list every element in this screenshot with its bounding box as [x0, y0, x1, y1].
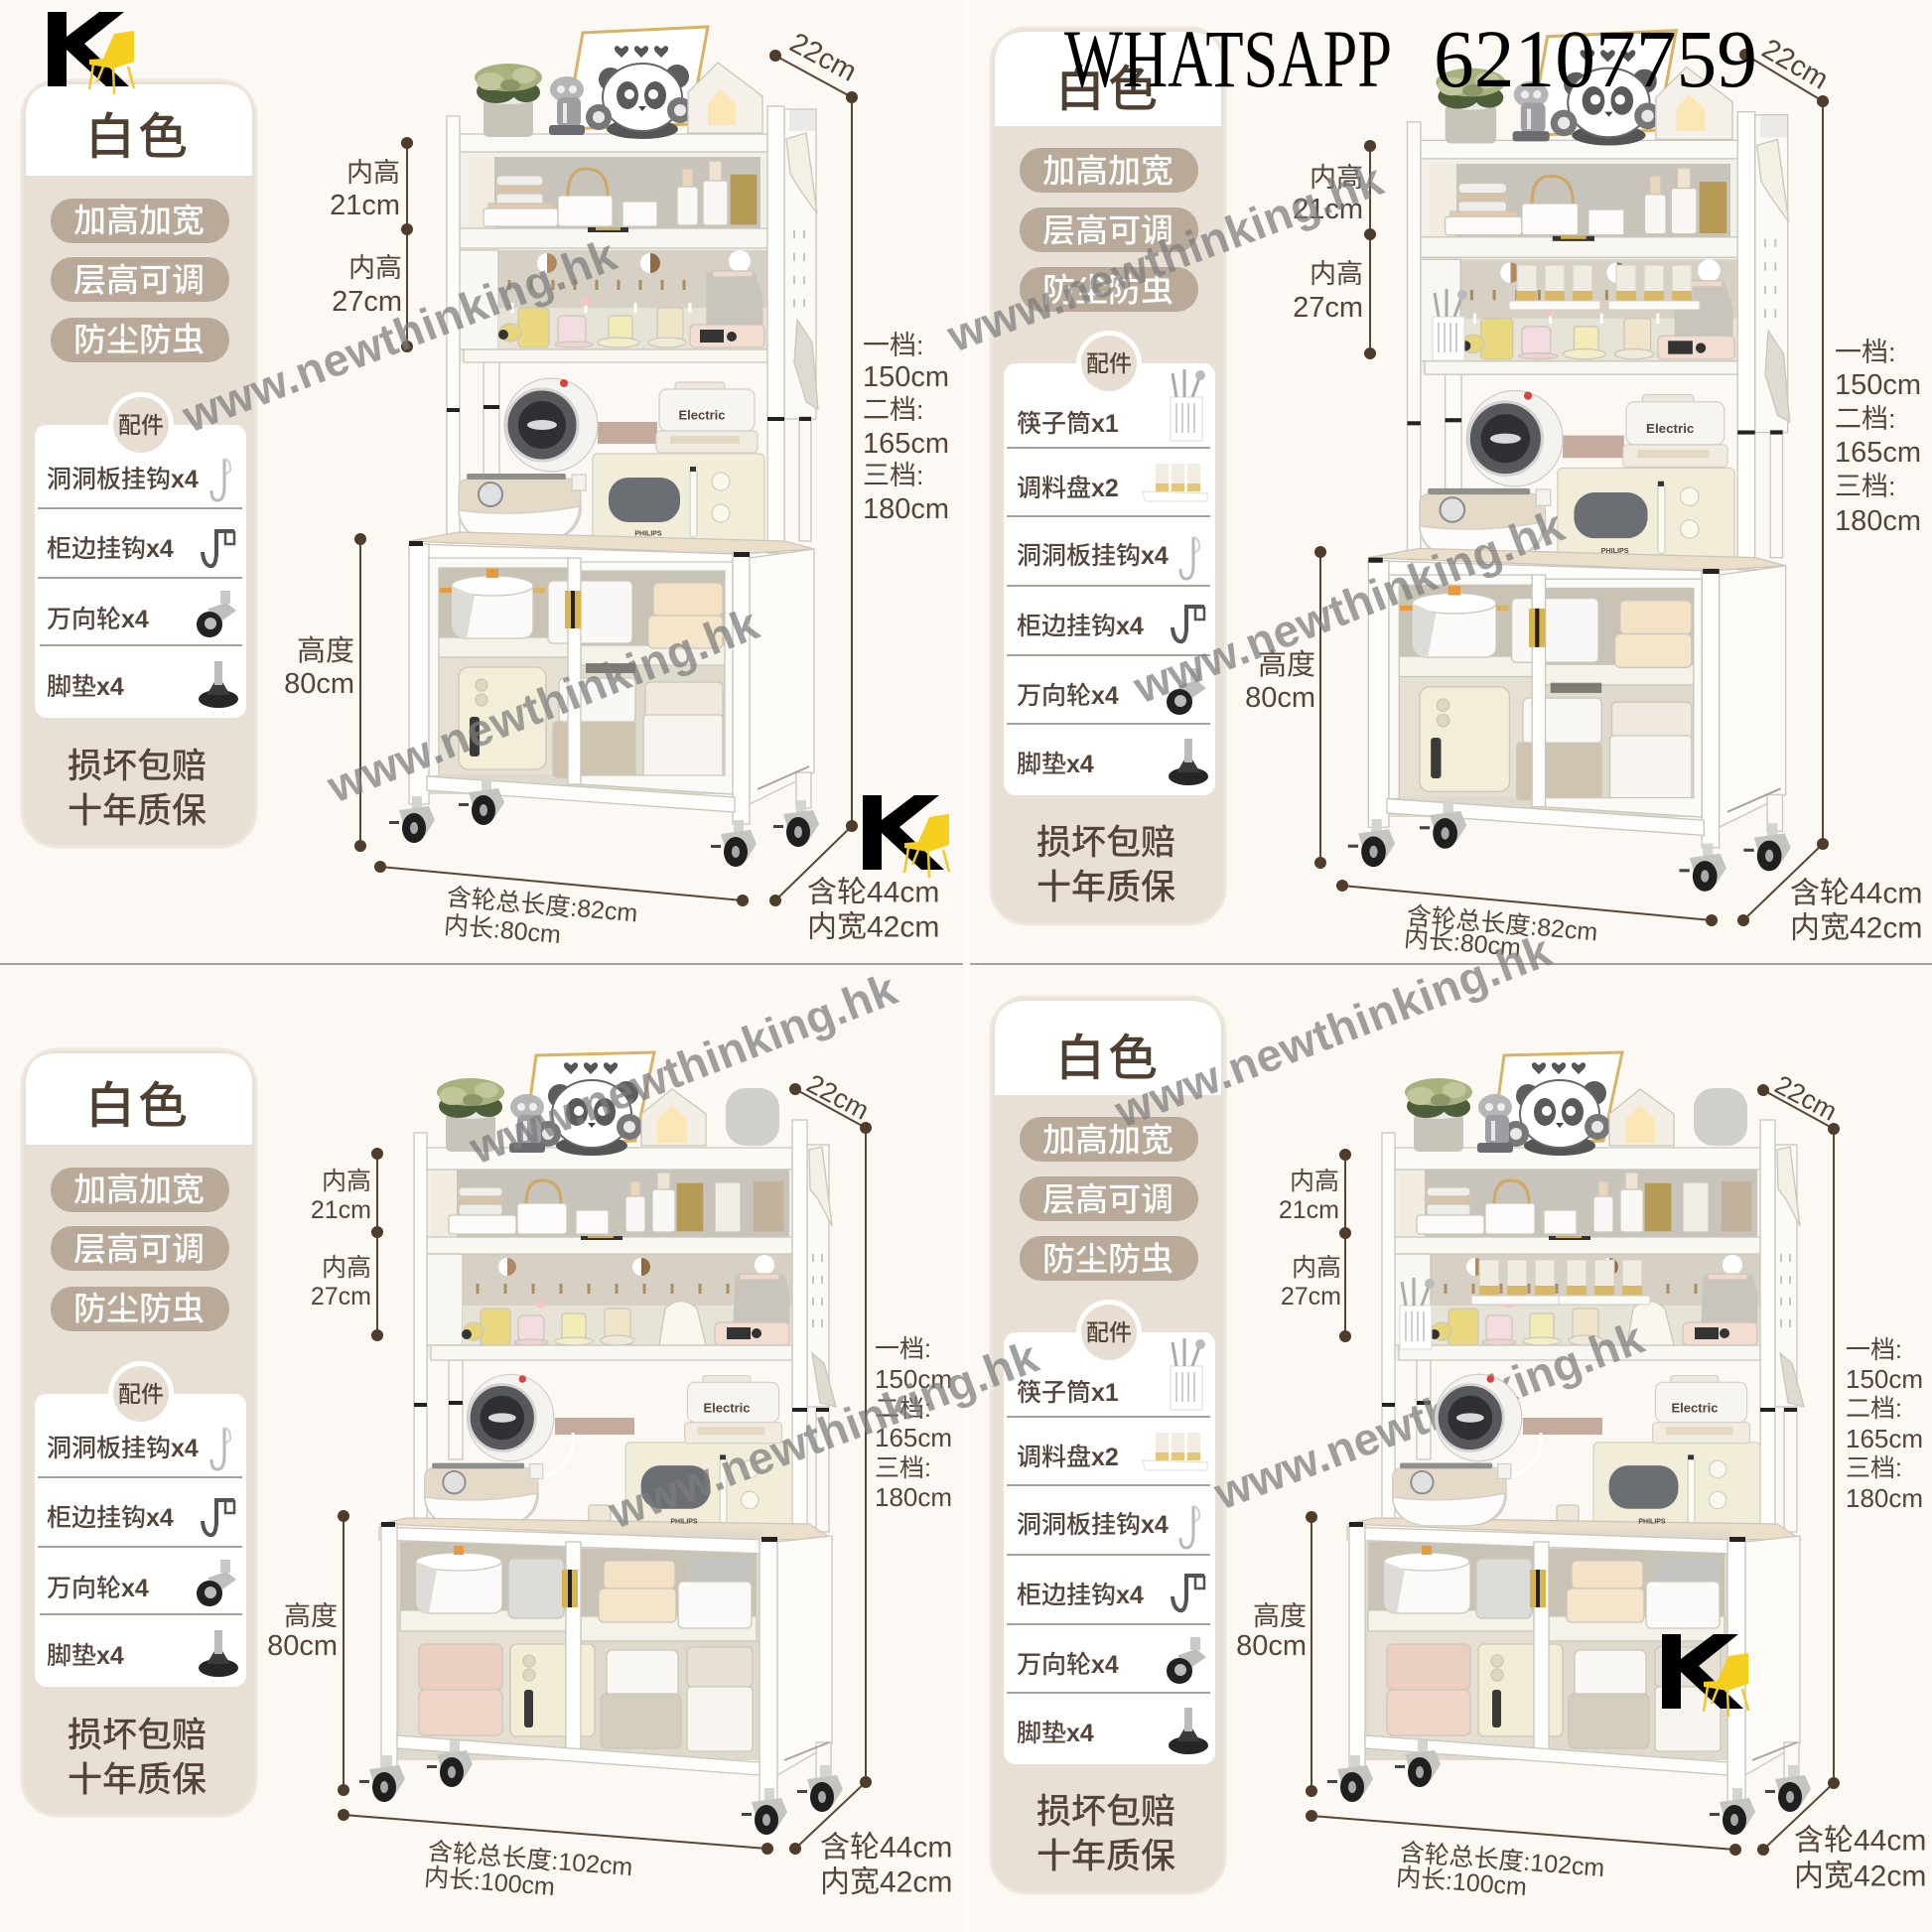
dimensions: top-left: 21cm	[330, 190, 400, 221]
product: top-right rack: Electric	[1646, 421, 1695, 436]
dimensions: top-right: 80cm	[1245, 682, 1315, 714]
guarantee text	[1036, 824, 1175, 907]
dimensions: top-right: 内高	[1310, 163, 1363, 193]
dimensions: bottom-right: 二档:	[1846, 1395, 1902, 1423]
product: bottom-right rack: Electric	[1672, 1400, 1718, 1416]
accessories box: 万向轮x4	[1017, 1651, 1119, 1679]
dimensions: bottom-left: 内高	[322, 1168, 371, 1195]
accessories box: 万向轮x4	[47, 606, 149, 633]
contact overlay text: 62107759	[1434, 13, 1757, 104]
feature pill: 加高加宽	[73, 203, 205, 238]
product: top-left rack: Electric	[679, 407, 725, 423]
logo: bottom-right panel	[1662, 1634, 1748, 1717]
accessories box	[1004, 331, 1215, 795]
dimensions: top-left: 22cm	[784, 27, 862, 88]
dimensions: top-right: 150cm	[1835, 369, 1921, 401]
feature pill	[1020, 1236, 1198, 1281]
accessories box: 调料盘x2	[1017, 475, 1119, 502]
product: bottom-right rack: PHILIPS	[1638, 1519, 1666, 1525]
dimensions: bottom-left: 含轮总长度:102cm	[427, 1838, 633, 1881]
guarantee text	[68, 1716, 207, 1799]
dimensions: top-right: 内长:80cm	[1403, 924, 1522, 962]
accessories box: 洞洞板挂钩x4	[1017, 542, 1169, 570]
feature pill	[51, 1168, 229, 1212]
dimensions: top-left: 165cm	[863, 428, 949, 460]
feature pill	[51, 1287, 229, 1331]
dimensions: top-left: 含轮总长度:82cm	[446, 884, 638, 927]
watermark: www.newthinking.hk	[1107, 924, 1558, 1138]
dimensions: top-left: 高度	[297, 634, 354, 667]
watermark: www.newthinking.hk	[1206, 1311, 1651, 1520]
feature pill: 防尘防虫	[73, 322, 205, 357]
dimensions: top-left: 80cm	[284, 668, 354, 700]
watermark: www.newthinking.hk	[1126, 499, 1572, 714]
accessories box: 柜边挂钩x4	[1017, 1582, 1144, 1609]
product: top-left rack	[389, 27, 819, 867]
dimensions: top-right: 高度	[1258, 648, 1315, 681]
accessories box: 万向轮x4	[1017, 682, 1119, 710]
guarantee text: 损坏包赔	[68, 1716, 207, 1755]
dimensions: bottom-left: 165cm	[875, 1423, 952, 1452]
feature pill	[1020, 1176, 1198, 1221]
dimensions: bottom-right: 165cm	[1846, 1424, 1923, 1453]
guarantee text	[1036, 1793, 1175, 1876]
accessories box: 脚垫x4	[47, 673, 124, 701]
accessories box: 洞洞板挂钩x4	[47, 1435, 199, 1462]
feature pill	[1020, 148, 1198, 193]
product: bottom-left rack: PHILIPS	[670, 1519, 698, 1525]
accessories box: 筷子筒x1	[1017, 410, 1119, 438]
guarantee text	[68, 747, 207, 830]
dimensions: bottom-left: 27cm	[311, 1283, 371, 1311]
dimensions: bottom-left: 二档:	[875, 1395, 931, 1423]
title: 白色	[1055, 1031, 1161, 1086]
dimensions: bottom-left: 内高	[322, 1254, 371, 1282]
dimensions: top-left: 180cm	[863, 493, 949, 525]
panel: top-left sidebar	[22, 80, 256, 847]
accessories box: 万向轮x4	[47, 1575, 149, 1602]
feature pill	[1020, 267, 1198, 312]
dimensions: top-left: 内长:80cm	[443, 911, 562, 949]
accessories box: 柜边挂钩x4	[1017, 613, 1144, 640]
dimensions: top-right: 27cm	[1293, 292, 1363, 324]
logo: top-left panel lower right	[863, 795, 949, 878]
guarantee text: 损坏包赔	[68, 747, 207, 786]
dimensions: bottom-left: 21cm	[311, 1196, 371, 1224]
dimensions: bottom-left: 含轮44cm	[820, 1831, 952, 1864]
accessories box: 洞洞板挂钩x4	[1017, 1511, 1169, 1539]
dimensions: top-right: 内高	[1310, 259, 1363, 289]
dimensions: bottom-left: 内长:100cm	[423, 1863, 556, 1901]
watermark: www.newthinking.hk	[320, 598, 765, 813]
guarantee text: 十年质保	[1036, 868, 1175, 907]
guarantee text: 十年质保	[1036, 1837, 1175, 1876]
feature pill	[51, 257, 229, 302]
feature pill	[1020, 207, 1198, 252]
watermark: www.newthinking.hk	[601, 1330, 1045, 1539]
dimensions: bottom-right: 一档:	[1846, 1336, 1902, 1364]
watermark: www.newthinking.hk	[462, 963, 903, 1174]
dimensions: top-left: 二档:	[863, 395, 924, 425]
contact overlay text: WHATSAPP	[1064, 13, 1392, 104]
accessories box: 脚垫x4	[1017, 751, 1094, 778]
feature pill: 加高加宽	[1042, 153, 1173, 189]
feature pill: 层高可调	[73, 1231, 205, 1267]
dimensions: bottom-right: 含轮44cm	[1794, 1825, 1926, 1857]
feature pill: 防尘防虫	[1042, 1241, 1173, 1277]
dimensions: bottom-right: 21cm	[1279, 1196, 1339, 1224]
feature pill: 防尘防虫	[1042, 272, 1173, 308]
accessories box: 配件	[1086, 350, 1132, 376]
accessories box: 配件	[118, 412, 164, 438]
title: 白色	[85, 109, 191, 165]
dimensions: top-left: 一档:	[863, 331, 924, 360]
accessories box: 柜边挂钩x4	[47, 535, 174, 563]
feature pill: 防尘防虫	[73, 1291, 205, 1326]
contact overlay text	[1064, 13, 1757, 104]
dimensions: top-right: 二档:	[1835, 404, 1896, 434]
dimensions: bottom-right: 三档:	[1846, 1454, 1902, 1482]
accessories box	[35, 392, 246, 718]
product: top-left rack: PHILIPS	[634, 530, 662, 538]
accessories box: 脚垫x4	[1017, 1720, 1094, 1747]
dimensions: bottom-right: 高度	[1253, 1601, 1307, 1631]
accessories box: 配件	[118, 1381, 164, 1407]
dimensions: top-right	[1245, 33, 1922, 962]
dimensions: bottom-left: 高度	[284, 1601, 338, 1631]
title: 白色	[1055, 62, 1161, 117]
feature pill: 加高加宽	[1042, 1122, 1173, 1158]
guarantee text: 损坏包赔	[1036, 1793, 1175, 1831]
logo: top-left	[48, 12, 134, 94]
dimensions: top-left: 内宽42cm	[807, 911, 939, 943]
feature pill: 层高可调	[1042, 212, 1173, 248]
product: top-right rack: PHILIPS	[1601, 546, 1629, 555]
feature pill	[51, 318, 229, 362]
dimensions: bottom-right: 内宽42cm	[1794, 1861, 1926, 1892]
product: bottom-left rack	[359, 1052, 843, 1835]
dimensions: top-left	[284, 27, 949, 949]
product: top-right rack	[1348, 31, 1791, 892]
dimensions: top-right: 内宽42cm	[1790, 911, 1922, 945]
dimensions: top-left: 内高	[348, 253, 402, 283]
dimensions: top-left: 含轮44cm	[807, 876, 939, 909]
accessories box: 调料盘x2	[1017, 1444, 1119, 1471]
dimensions: bottom-right: 80cm	[1236, 1630, 1307, 1662]
dimensions: bottom-left: 22cm	[802, 1068, 874, 1126]
panel: top-right sidebar	[991, 28, 1225, 924]
panel: bottom-left sidebar	[22, 1049, 256, 1816]
panel: bottom-right sidebar	[991, 997, 1225, 1893]
dimensions: bottom-right: 含轮总长度:102cm	[1399, 1839, 1605, 1882]
accessories box: 洞洞板挂钩x4	[47, 466, 199, 493]
dimensions: bottom-left: 180cm	[875, 1482, 952, 1512]
feature pill	[51, 199, 229, 243]
dimensions: bottom-right: 内长:100cm	[1395, 1863, 1528, 1901]
feature pill: 层高可调	[1042, 1181, 1173, 1217]
dimensions: bottom-right	[1236, 1069, 1926, 1901]
dimensions: bottom-right: 150cm	[1846, 1364, 1923, 1394]
dimensions: top-right: 180cm	[1835, 505, 1921, 537]
accessories box	[1004, 1300, 1215, 1764]
product: bottom-left rack: Electric	[704, 1400, 750, 1416]
dimensions: top-right: 21cm	[1293, 194, 1363, 225]
dimensions: top-right: 含轮总长度:82cm	[1406, 902, 1598, 946]
dimensions: bottom-left: 150cm	[875, 1364, 952, 1394]
watermark: www.newthinking.hk	[175, 228, 623, 443]
accessories box: 筷子筒x1	[1017, 1379, 1119, 1407]
watermark: www.newthinking.hk	[939, 153, 1390, 362]
dimensions: top-right: 三档:	[1835, 472, 1896, 501]
dimensions: bottom-left: 三档:	[875, 1454, 931, 1482]
dimensions: bottom-right: 22cm	[1770, 1069, 1842, 1127]
accessories box: 配件	[1086, 1319, 1132, 1345]
feature pill	[1020, 1117, 1198, 1162]
dimensions: top-right: 含轮44cm	[1790, 878, 1922, 909]
dimensions: top-left: 150cm	[863, 361, 949, 393]
product: bottom-right rack	[1327, 1052, 1811, 1835]
feature pill: 加高加宽	[73, 1172, 205, 1207]
dimensions: top-left: 内高	[346, 158, 400, 188]
title: 白色	[85, 1078, 191, 1134]
dimensions: top-right: 22cm	[1756, 33, 1834, 96]
guarantee text: 损坏包赔	[1036, 824, 1175, 862]
feature pill	[51, 1226, 229, 1271]
guarantee text: 十年质保	[68, 792, 207, 830]
dimensions: top-right: 一档:	[1835, 338, 1896, 367]
dimensions: bottom-right: 内高	[1292, 1254, 1341, 1282]
guarantee text: 十年质保	[68, 1761, 207, 1799]
dimensions: bottom-left: 80cm	[267, 1630, 338, 1662]
dimensions: top-left: 三档:	[863, 461, 924, 490]
dimensions: bottom-right: 180cm	[1846, 1483, 1923, 1513]
dimensions: bottom-left: 内宽42cm	[820, 1866, 952, 1898]
dimensions: bottom-right: 内高	[1290, 1168, 1339, 1195]
feature pill: 层高可调	[73, 262, 205, 298]
accessories box	[35, 1361, 246, 1687]
dimensions: top-right: 165cm	[1835, 437, 1921, 469]
dimensions: bottom-left	[267, 1068, 952, 1901]
dimensions: bottom-left: 一档:	[875, 1335, 931, 1363]
accessories box: 脚垫x4	[47, 1642, 124, 1670]
dimensions: top-left: 27cm	[332, 286, 402, 318]
dimensions: bottom-right: 27cm	[1281, 1283, 1341, 1311]
accessories box: 柜边挂钩x4	[47, 1504, 174, 1532]
product: rice cooker in front of watermark	[1393, 1374, 1522, 1526]
